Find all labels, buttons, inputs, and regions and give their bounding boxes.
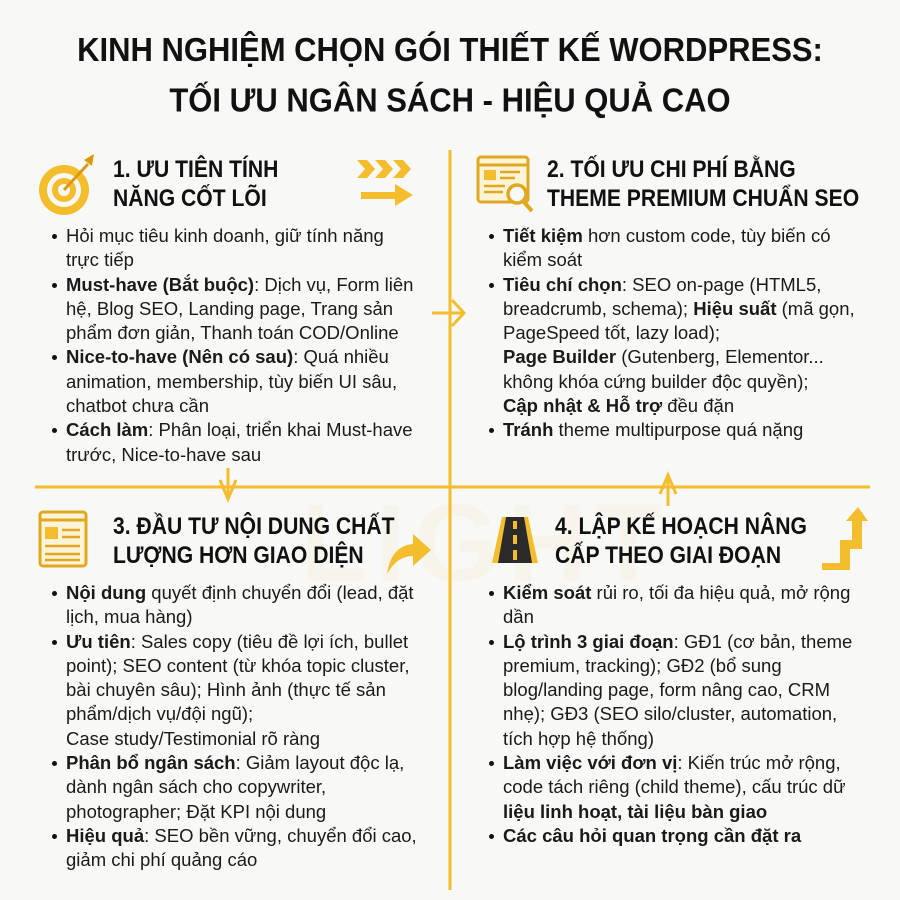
body 2: breadcrumb, schema); Hiệu suất (mã gọn, xyxy=(503,298,855,319)
body 4: premium, tracking); GĐ2 (bổ sung xyxy=(503,655,782,676)
heading 2 xyxy=(547,155,859,212)
body 1: hệ, Blog SEO, Landing page, Trang sản xyxy=(66,298,393,319)
body 3: bài chuyên sâu); Hình ảnh (thực tế sản xyxy=(66,679,386,700)
icon: step arrow xyxy=(822,507,868,570)
heading 3: LƯỢNG HƠN GIAO DIỆN xyxy=(113,542,364,569)
body 4: nhẹ); GĐ3 (SEO silo/cluster, automation, xyxy=(503,703,837,724)
icon: document xyxy=(38,510,88,568)
body 3: giảm chi phí quảng cáo xyxy=(66,849,257,870)
body 4: code tách riêng (child theme), cấu trúc dữ xyxy=(503,776,845,797)
body 1: animation, membership, tùy biến UI sâu, xyxy=(66,371,397,392)
heading 1: NĂNG CỐT LÕI xyxy=(113,185,267,212)
body 4: tích hợp hệ thống) xyxy=(503,728,654,749)
body 3: Nội dung quyết định chuyển đổi (lead, đặt xyxy=(66,582,414,603)
body 1: chatbot chưa cần xyxy=(66,395,209,416)
body 4: Kiểm soát rủi ro, tối đa hiệu quả, mở rộng xyxy=(503,582,850,603)
heading 1: 1. ƯU TIÊN TÍNH xyxy=(113,156,278,183)
body 1: Cách làm: Phân loại, triển khai Must-have xyxy=(66,419,413,440)
body 1: phẩm đơn giản, Thanh toán COD/Online xyxy=(66,322,399,343)
body 3: dành ngân sách cho copywriter, xyxy=(66,776,326,797)
body 4: blog/landing page, form nâng cao, CRM xyxy=(503,679,830,700)
icon: road xyxy=(492,517,538,563)
body 3: Hiệu quả: SEO bền vững, chuyển đổi cao, xyxy=(66,825,417,846)
body 2: kiểm soát xyxy=(503,249,582,270)
heading 2: THEME PREMIUM CHUẨN SEO xyxy=(547,185,859,212)
body 4: Làm việc với đơn vị: Kiến trúc mở rộng, xyxy=(503,752,841,773)
body 2 xyxy=(489,225,855,440)
watermark: LIGHT xyxy=(300,482,670,605)
heading 2: 2. TỐI ƯU CHI PHÍ BẰNG xyxy=(547,156,796,183)
heading 3 xyxy=(113,512,395,569)
body 2: Tiết kiệm hơn custom code, tùy biến có xyxy=(503,225,831,246)
heading 3: 3. ĐẦU TƯ NỘI DUNG CHẤT xyxy=(113,513,395,540)
body 2: không khóa cứng builder độc quyền); xyxy=(503,371,809,392)
body 1: trực tiếp xyxy=(66,249,134,270)
title: TỐI ƯU NGÂN SÁCH - HIỆU QUẢ CAO xyxy=(169,81,731,119)
icon: arrows xyxy=(357,160,413,206)
body 1: Hỏi mục tiêu kinh doanh, giữ tính năng xyxy=(66,225,384,246)
body 2: PageSpeed tốt, lazy load); xyxy=(503,322,720,343)
body 2: Cập nhật & Hỗ trợ đều đặn xyxy=(503,395,734,416)
body 3: lịch, mua hàng) xyxy=(66,606,192,627)
body 4 xyxy=(489,582,852,846)
body 1: trước, Nice-to-have sau xyxy=(66,444,261,465)
body 4: dần xyxy=(503,606,534,627)
body 1: Nice-to-have (Nên có sau): Quá nhiều xyxy=(66,346,389,367)
body 2: Tránh theme multipurpose quá nặng xyxy=(503,419,803,440)
body 3: Ưu tiên: Sales copy (tiêu đề lợi ích, bullet xyxy=(66,631,408,652)
body 3: Phân bổ ngân sách: Giảm layout độc lạ, xyxy=(66,752,404,773)
icon: target xyxy=(39,154,94,215)
icon: browser search xyxy=(476,156,534,212)
icon: curved arrow xyxy=(387,534,431,574)
body 4: liệu linh hoạt, tài liệu bàn giao xyxy=(503,801,767,822)
heading 4: CẤP THEO GIAI ĐOẠN xyxy=(555,542,781,569)
body 3: photographer; Đặt KPI nội dung xyxy=(66,801,326,822)
body 3: point); SEO content (từ khóa topic cluster, xyxy=(66,655,410,676)
body 4: Các câu hỏi quan trọng cần đặt ra xyxy=(503,825,801,846)
body 3 xyxy=(52,582,417,870)
title: KINH NGHIỆM CHỌN GÓI THIẾT KẾ WORDPRESS: xyxy=(77,31,823,69)
body 1: Must-have (Bắt buộc): Dịch vụ, Form liên xyxy=(66,274,413,295)
heading 4 xyxy=(555,512,807,569)
title xyxy=(77,31,823,119)
body 3: phẩm/dịch vụ/đội ngũ); xyxy=(66,703,253,724)
heading 1 xyxy=(113,155,278,212)
body 2: Page Builder (Gutenberg, Elementor... xyxy=(503,346,824,367)
body 1 xyxy=(52,225,413,465)
heading 4: 4. LẬP KẾ HOẠCH NÂNG xyxy=(555,513,807,540)
body 4: Lộ trình 3 giai đoạn: GĐ1 (cơ bản, theme xyxy=(503,631,852,652)
body 2: Tiêu chí chọn: SEO on-page (HTML5, xyxy=(503,274,821,295)
body 3: Case study/Testimonial rõ ràng xyxy=(66,728,320,749)
